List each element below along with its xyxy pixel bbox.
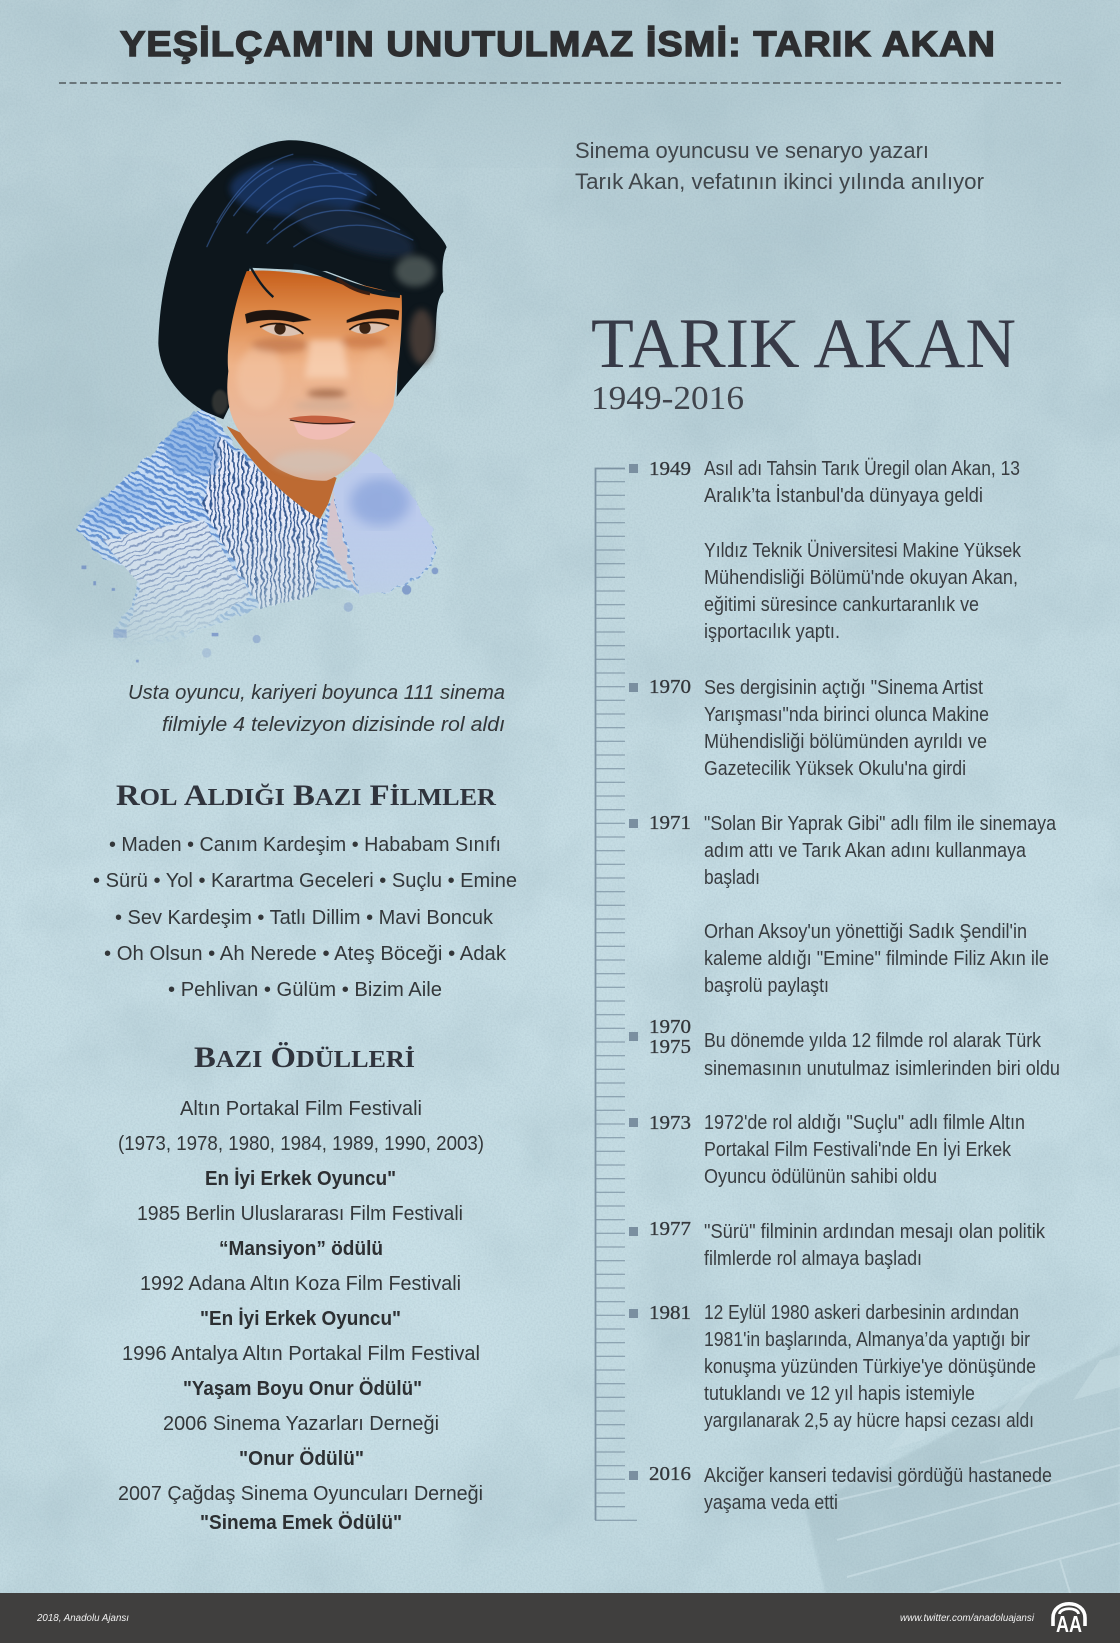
- timeline entries: Ses dergisinin açtığı "Sinema Artist: [704, 677, 983, 699]
- awards list: "En İyi Erkek Oyuncu": [200, 1307, 401, 1330]
- icon: Anadolu Agency logo: [1053, 1604, 1085, 1637]
- portrait illustration: [75, 140, 447, 662]
- timeline entries: sinemasının unutulmaz isimlerinden biri oldu: [704, 1058, 1060, 1080]
- timeline years: 1970: [649, 1016, 691, 1038]
- heading: awards: BAZI ÖDÜLLERI: [194, 1041, 415, 1074]
- portrait: mouth: [288, 416, 356, 440]
- timeline entries: konuşma yüzünden Türkiye'ye dönüşünde: [704, 1356, 1036, 1378]
- timeline entries: 12 Eylül 1980 askeri darbesinin ardından: [704, 1302, 1019, 1324]
- film list: • Pehlivan • Gülüm • Bizim Aile: [168, 979, 442, 1001]
- timeline entries: Akciğer kanseri tedavisi gördüğü hastanede: [704, 1465, 1052, 1487]
- footer link: www.twitter.com/anadoluajansi: [900, 1613, 1035, 1624]
- awards list: 2007 Çağdaş Sinema Oyuncuları Derneği: [118, 1483, 483, 1505]
- timeline entries: Oyuncu ödülünün sahibi oldu: [704, 1166, 937, 1188]
- timeline entries: kaleme aldığı "Emine" filminde Filiz Akın ile: [704, 948, 1049, 970]
- life dates: 1949-2016: [591, 380, 744, 417]
- timeline entries: eğitimi süresince cankurtaranlık ve: [704, 594, 979, 616]
- footer bar: [0, 1593, 1120, 1643]
- timeline entries: Aralık’ta İstanbul'da dünyaya geldi: [704, 484, 983, 507]
- portrait: paint splatter: [82, 566, 438, 662]
- portrait: neck: [227, 426, 337, 519]
- timeline entries: Yarışması"nda birinci olunca Makine: [704, 704, 989, 726]
- portrait: shirt: [75, 406, 435, 650]
- awards list: 1985 Berlin Uluslararası Film Festivali: [137, 1203, 463, 1225]
- timeline years: 1970: [649, 676, 691, 698]
- name heading: TARIK AKAN: [591, 305, 1016, 383]
- timeline entries: Mühendisliği bölümünden ayrıldı ve: [704, 731, 987, 753]
- timeline entries: yaşama veda etti: [704, 1492, 838, 1514]
- timeline ruler: [595, 468, 637, 1520]
- portrait: eyebrows and eyes: [245, 309, 399, 336]
- intro text: Tarık Akan, vefatının ikinci yılında anılıyor: [575, 169, 984, 194]
- timeline years: 1981: [649, 1302, 691, 1324]
- timeline years: 1971: [649, 812, 691, 834]
- timeline entries: "Solan Bir Yaprak Gibi" adlı film ile sinemaya: [704, 813, 1057, 835]
- timeline entries: Mühendisliği Bölümü'nde okuyan Akan,: [704, 567, 1018, 589]
- timeline entries: 1972'de rol aldığı "Suçlu" adlı filmle Altın: [704, 1112, 1025, 1134]
- awards list: "Sinema Emek Ödülü": [200, 1511, 402, 1534]
- intro text: [575, 138, 984, 194]
- film list: • Maden • Canım Kardeşim • Hababam Sınıfı: [109, 834, 501, 856]
- awards list: 2006 Sinema Yazarları Derneği: [163, 1413, 439, 1435]
- awards list: "Yaşam Boyu Onur Ödülü": [183, 1377, 422, 1400]
- title: YEŞİLÇAM'IN UNUTULMAZ İSMİ: TARIK AKAN: [120, 25, 996, 64]
- timeline years: 1977: [649, 1218, 691, 1240]
- portrait: sideburn: [212, 390, 228, 414]
- timeline entries: başladı: [704, 867, 760, 889]
- caption: Usta oyuncu, kariyeri boyunca 111 sinema: [128, 682, 505, 704]
- portrait: fringe: [250, 266, 400, 297]
- portrait: face: [227, 271, 402, 481]
- film list: • Sürü • Yol • Karartma Geceleri • Suçlu • Emine: [93, 870, 517, 892]
- footer credit: 2018, Anadolu Ajansı: [36, 1613, 129, 1624]
- timeline entries: tutuklandı ve 12 yıl hapis istemiyle: [704, 1383, 975, 1405]
- timeline entries: başrolü paylaştı: [704, 975, 829, 997]
- awards list: “Mansiyon” ödülü: [219, 1238, 383, 1260]
- timeline entries: Bu dönemde yılda 12 filmde rol alarak Türk: [704, 1030, 1042, 1052]
- timeline entries: Asıl adı Tahsin Tarık Üregil olan Akan, 13: [704, 458, 1020, 480]
- portrait: hair strands: [207, 154, 413, 247]
- timeline years: 1975: [649, 1036, 691, 1058]
- timeline years: 1973: [649, 1112, 691, 1134]
- timeline years: 2016: [649, 1463, 691, 1485]
- awards list: "Onur Ödülü": [239, 1447, 364, 1470]
- awards list: En İyi Erkek Oyuncu": [205, 1167, 396, 1190]
- timeline years: [649, 458, 691, 1485]
- awards list: (1973, 1978, 1980, 1984, 1989, 1990, 2003): [118, 1133, 484, 1155]
- film list: • Oh Olsun • Ah Nerede • Ateş Böceği • Adak: [104, 943, 507, 965]
- timeline entries: Gazetecilik Yüksek Okulu'na girdi: [704, 758, 966, 780]
- timeline years: 1949: [649, 458, 691, 480]
- background: film clapperboard watermark: [805, 1345, 1120, 1593]
- awards list: 1996 Antalya Altın Portakal Film Festival: [122, 1343, 480, 1365]
- timeline entries: adım attı ve Tarık Akan adını kullanmaya: [704, 840, 1027, 862]
- timeline entries: işportacılık yaptı.: [704, 621, 840, 643]
- caption: filmiyle 4 televizyon dizisinde rol aldı: [162, 714, 505, 736]
- portrait: face shading: [237, 335, 393, 474]
- portrait: hair: [158, 140, 447, 419]
- portrait: hair highlights: [230, 161, 435, 364]
- timeline entries: Yıldız Teknik Üniversitesi Makine Yüksek: [704, 540, 1022, 562]
- timeline entries: Portakal Film Festivali'nde En İyi Erkek: [704, 1138, 1012, 1161]
- caption: [128, 682, 505, 736]
- timeline entries: yargılanarak 2,5 ay hücre hapsi cezası aldı: [704, 1410, 1034, 1432]
- awards list: Altın Portakal Film Festivali: [180, 1098, 422, 1120]
- timeline entries: 1981'in başlarında, Almanya’da yaptığı bir: [704, 1329, 1030, 1351]
- timeline entries: [704, 458, 1060, 1514]
- timeline entries: filmlerde rol almaya başladı: [704, 1248, 922, 1270]
- intro text: Sinema oyuncusu ve senaryo yazarı: [575, 138, 929, 163]
- awards list: [118, 1098, 484, 1534]
- film list: [93, 834, 517, 1001]
- film list: • Sev Kardeşim • Tatlı Dillim • Mavi Boncuk: [115, 907, 494, 929]
- heading: films: ROL ALDIĞI BAZI FILMLER: [116, 779, 497, 812]
- timeline entries: Orhan Aksoy'un yönettiği Sadık Şendil'in: [704, 921, 1027, 943]
- timeline entries: "Sürü" filminin ardından mesajı olan politik: [704, 1221, 1046, 1243]
- awards list: 1992 Adana Altın Koza Film Festivali: [140, 1273, 461, 1295]
- timeline markers: [629, 464, 638, 1480]
- icon: Anadolu Agency logo: AA: [1056, 1611, 1082, 1637]
